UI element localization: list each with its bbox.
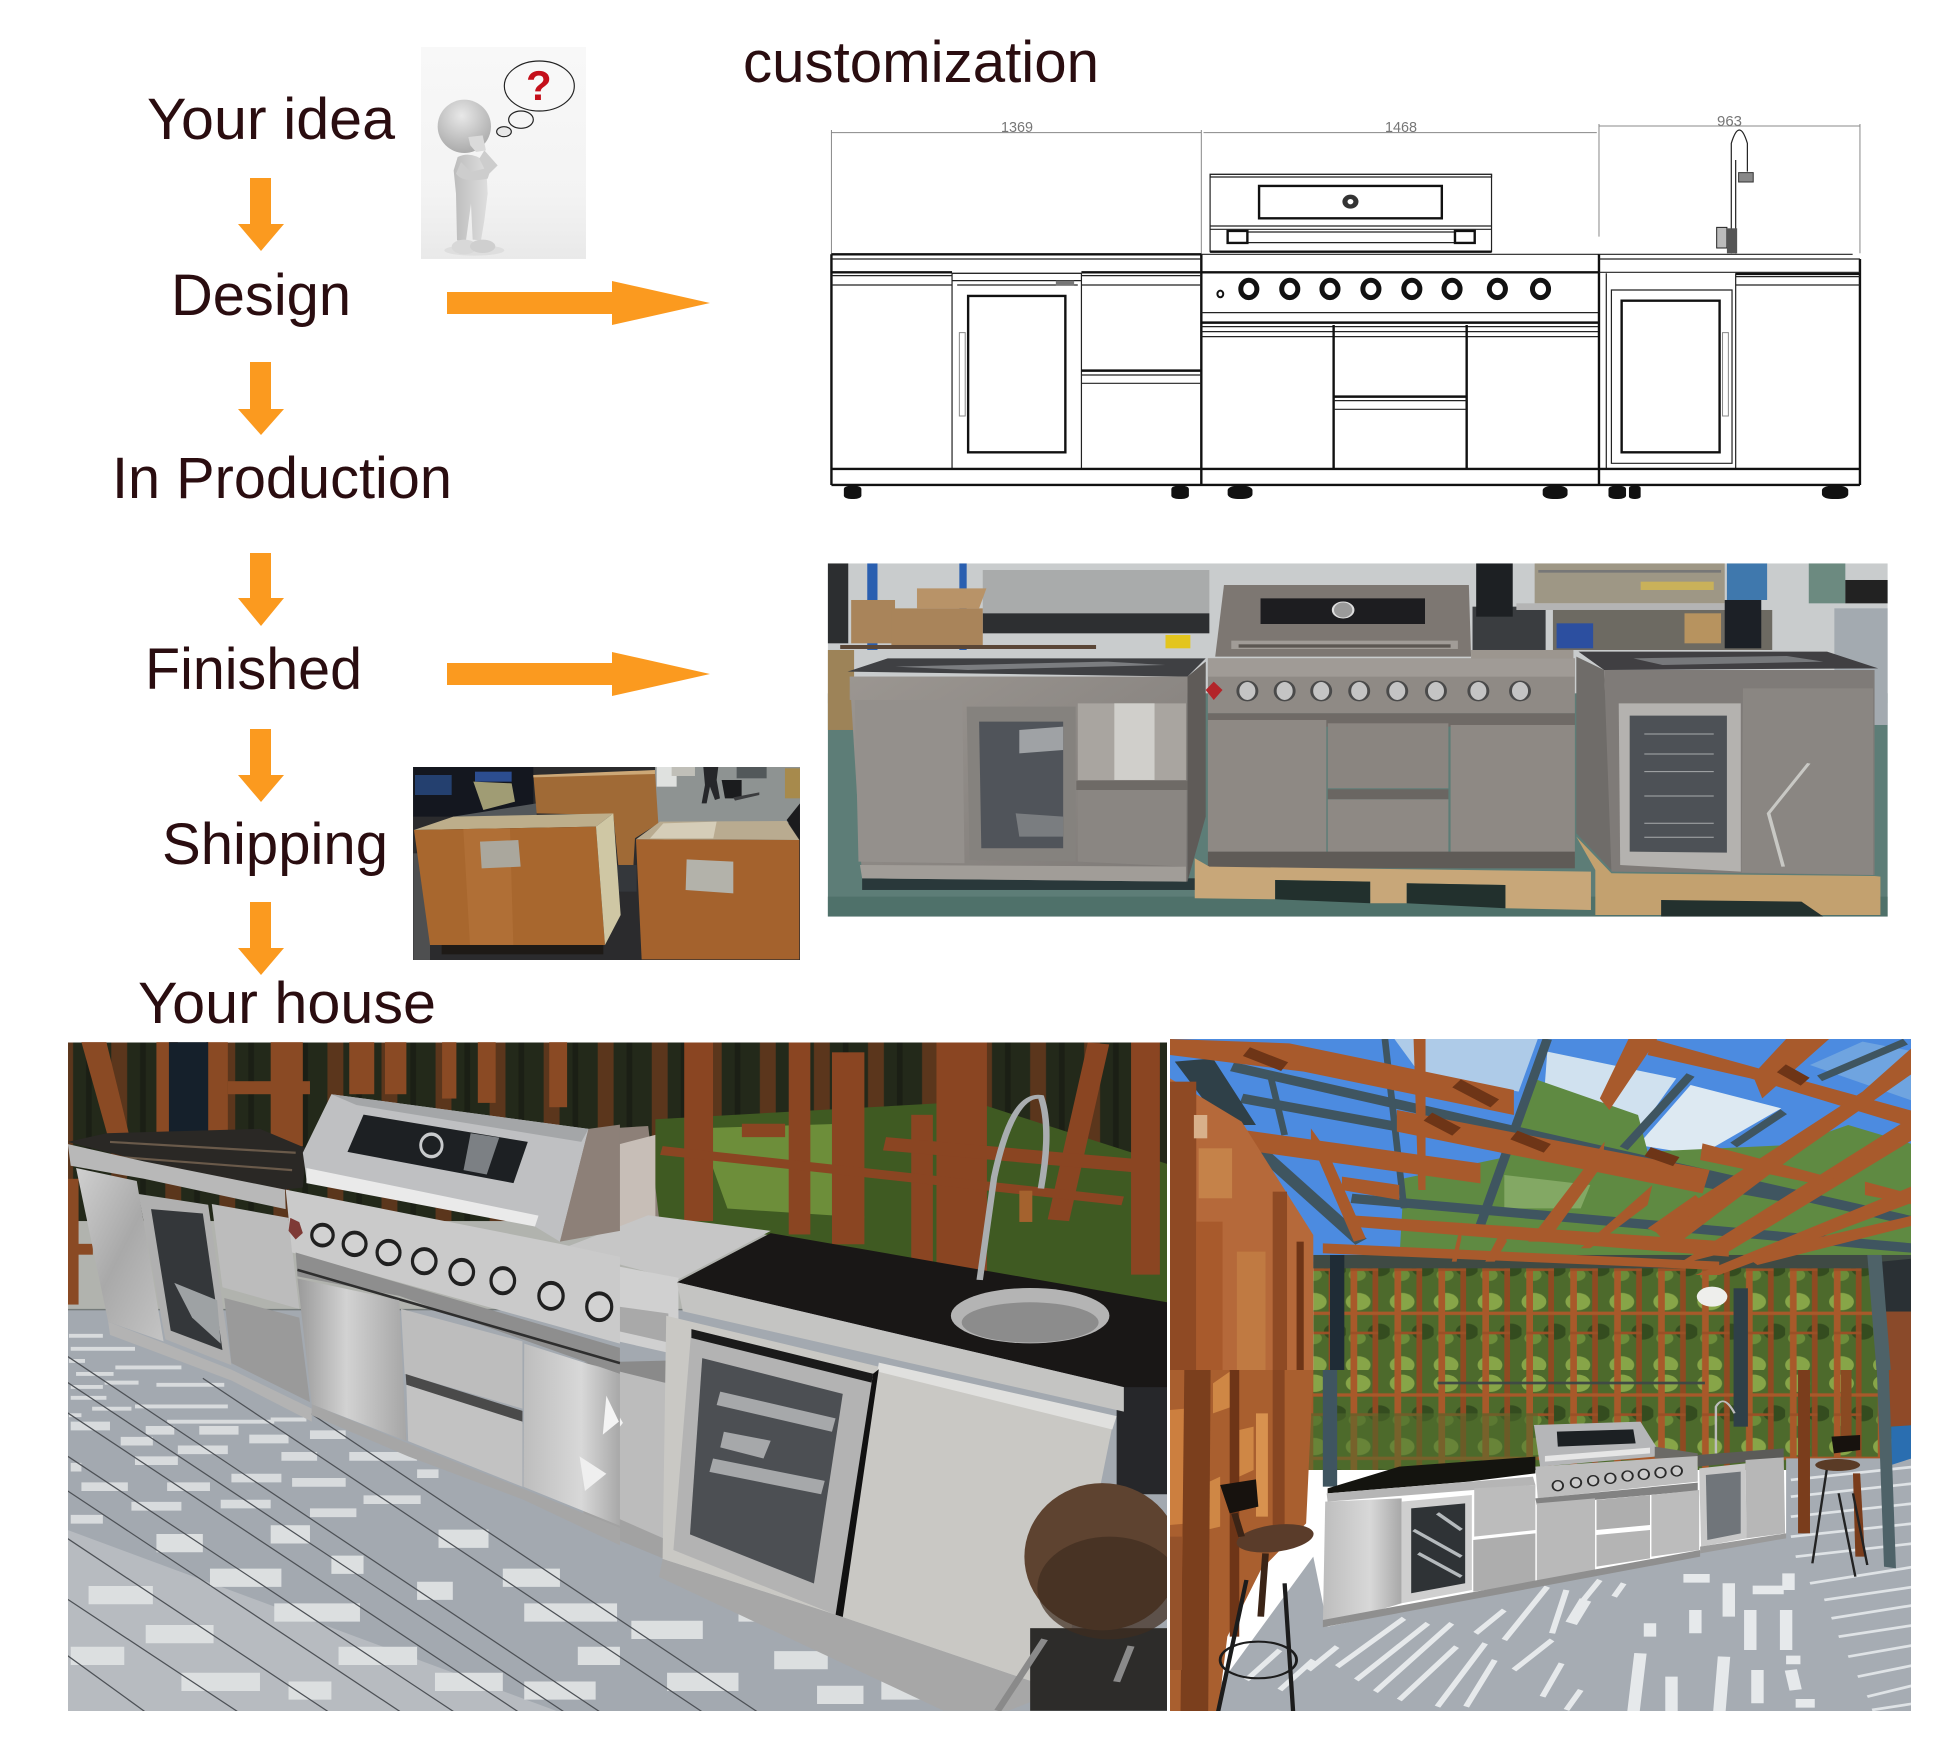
dimension label 1369: 1369 xyxy=(1001,119,1033,136)
arrow: finished to factory photo xyxy=(447,652,710,696)
wood slat fence and garden background xyxy=(68,1042,1167,1494)
dimension label 963: 963 xyxy=(1717,113,1742,130)
outdoor kitchen unit xyxy=(1323,1401,1786,1627)
photo: installed outdoor kitchen close-up xyxy=(68,1042,1181,1748)
step label: In Production: In Production xyxy=(112,446,452,511)
speaker xyxy=(1697,1287,1727,1307)
photo: finished kitchen units in factory xyxy=(828,563,1888,917)
grill control panel and knobs xyxy=(1201,254,1599,323)
deck with sun pattern xyxy=(1199,1458,1915,1713)
left timber posts xyxy=(1170,1370,1337,1713)
steel columns and right end xyxy=(1330,1255,1915,1375)
timber beams xyxy=(1170,1039,1915,1275)
wood pallet under grill xyxy=(1195,858,1591,910)
step label: Shipping: Shipping xyxy=(162,812,388,877)
right part: burner shelf, counter, sink, fridge and door xyxy=(562,1097,1167,1711)
bar stool xyxy=(998,1483,1181,1711)
arrow: production to finished xyxy=(238,553,284,626)
step label: Design: Design xyxy=(171,263,351,328)
icon: question mark: ? xyxy=(526,62,552,109)
title: customization: customization xyxy=(743,30,1099,95)
sunlit deck floor xyxy=(68,1309,1175,1748)
dimension label 1468: 1468 xyxy=(1385,119,1417,136)
left timber posts xyxy=(1170,1078,1313,1375)
worker with pallet jack xyxy=(702,767,759,803)
step label: Finished: Finished xyxy=(145,637,362,702)
left cabinet unit xyxy=(848,658,1206,882)
dimension lines xyxy=(831,124,1860,254)
right timber posts, steel column and tarp xyxy=(1734,1370,1915,1568)
step label: Your idea: Your idea xyxy=(147,87,396,152)
factory background xyxy=(828,563,1888,917)
arrow: idea to design xyxy=(238,178,284,251)
arrow: design to drawing xyxy=(447,281,710,325)
right cabinet unit xyxy=(1576,652,1878,875)
steel roof grid xyxy=(1232,1039,1915,1248)
right cabinet section with faucet xyxy=(1599,130,1860,485)
pergola roof and back lattice xyxy=(1170,1035,1915,1375)
technical drawing: elevation of outdoor kitchen xyxy=(831,124,1860,499)
lower scene: kitchen, deck and stools xyxy=(1170,1370,1915,1713)
left cabinet section xyxy=(831,254,1201,485)
wood pallet under right cabinet xyxy=(1576,837,1880,917)
arrow: design to production xyxy=(238,362,284,435)
fence posts on left xyxy=(68,1042,567,1305)
grill hood xyxy=(1210,174,1492,252)
icon: thinking figure with question bubble xyxy=(421,47,586,259)
arrow: finished to shipping xyxy=(238,729,284,802)
grill lower cabinet xyxy=(1201,325,1599,469)
center grill unit xyxy=(1206,585,1575,868)
plinth and wheels xyxy=(831,469,1860,499)
photo: wooden shipping crates xyxy=(410,760,810,967)
right bar stool xyxy=(1812,1435,1867,1577)
photo: pergola with installed outdoor kitchen xyxy=(1170,1035,1915,1713)
arrow: shipping to house xyxy=(238,902,284,975)
step label: Your house: Your house xyxy=(138,971,436,1036)
left part: counter, cabinets, grill hood and knobs xyxy=(68,1042,620,1545)
left bar stool xyxy=(1218,1479,1317,1713)
